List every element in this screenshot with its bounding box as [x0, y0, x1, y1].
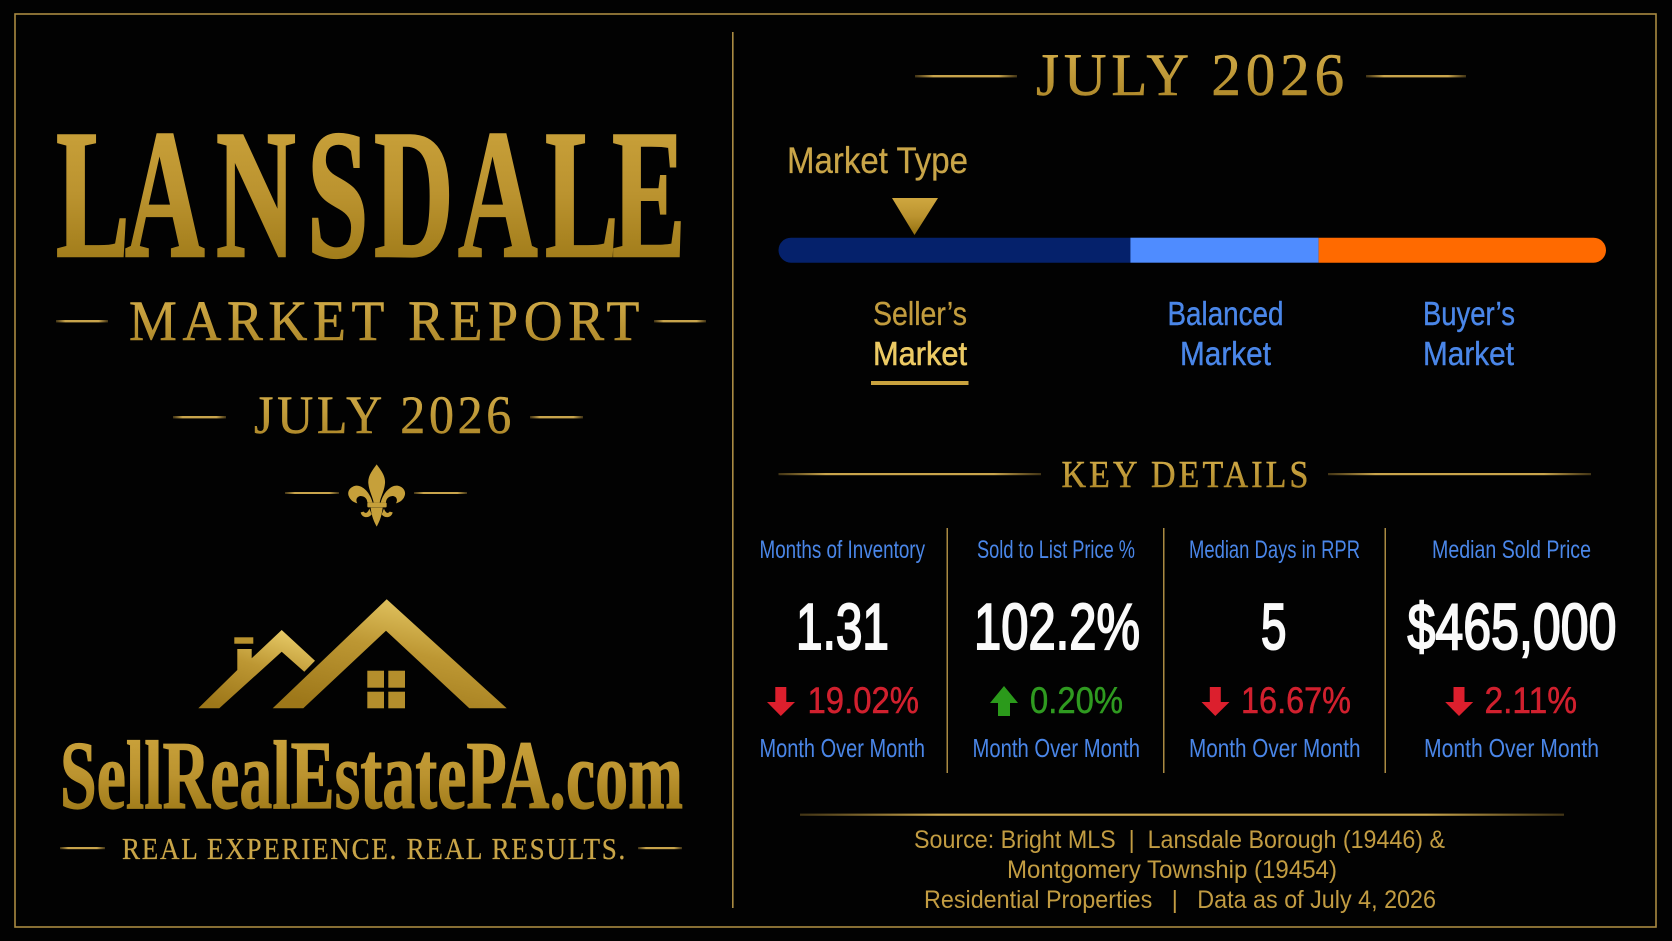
icon: down arrow	[1445, 687, 1473, 716]
metric: Months of Inventory: 19.02%	[808, 680, 919, 721]
icon: market pointer triangle	[892, 198, 938, 235]
icon: down arrow	[767, 687, 795, 716]
metric: Sold to List Price	[972, 536, 1140, 763]
icon: house roof logo	[198, 599, 507, 708]
column dividers	[946, 528, 1386, 773]
title: Lansdale: LANSDALE	[56, 92, 686, 296]
metric: Median Sold Price	[1408, 536, 1616, 763]
metric: Median Sold Price: Median Sold Price	[1432, 536, 1591, 564]
metric: Median Sold Price: $465,000	[1408, 590, 1616, 663]
label: Buyer's Market: Buyer’s	[1423, 295, 1515, 332]
center divider	[732, 32, 734, 908]
tagline: REAL EXPERIENCE. REAL RESULTS.	[122, 831, 627, 866]
metric: Sold to List Price: Month Over Month	[972, 733, 1140, 763]
metric: Median Days in RPR	[1189, 536, 1360, 763]
label: Seller's Market: Market	[873, 335, 967, 372]
heading: July 2026: JULY 2026	[1036, 42, 1349, 108]
source note	[914, 826, 1445, 914]
metric: Months of Inventory	[760, 536, 925, 763]
subtitle: Market Report: MARKET REPORT	[129, 290, 645, 353]
label: Balanced Market: Balanced	[1168, 295, 1284, 332]
metric: Median Sold Price: Month Over Month	[1424, 733, 1599, 763]
metric: Months of Inventory: 1.31	[796, 590, 889, 663]
label: Buyer's Market	[1423, 295, 1515, 372]
panel: right market data	[760, 42, 1616, 914]
heading: Key Details: KEY DETAILS	[1062, 454, 1312, 496]
icon: fleur-de-lis ornament	[285, 464, 467, 527]
metric: Median Days in RPR: Median Days in RPR	[1189, 536, 1360, 564]
metric: Median Sold Price: 2.11%	[1484, 680, 1577, 721]
market type scale bar	[779, 238, 1606, 263]
date: July 2026: JULY 2026	[254, 385, 515, 445]
label: Buyer's Market: Market	[1423, 335, 1514, 372]
icon: up arrow	[990, 686, 1018, 716]
metric: Median Days in RPR: 5	[1261, 590, 1286, 663]
source note: Residential Properties | Data as of July 4, 2026	[924, 886, 1436, 914]
metric: Median Days in RPR: Month Over Month	[1189, 733, 1360, 763]
metric: Sold to List Price: 102.2%	[974, 590, 1140, 663]
metric: Sold to List Price: Sold to List Price %	[977, 536, 1135, 564]
icon: down arrow	[1202, 687, 1230, 716]
source note: Montgomery Township (19454)	[1007, 856, 1337, 884]
label: Seller's Market: Seller’s	[873, 295, 967, 332]
label: Seller's Market	[871, 295, 968, 385]
brand website name: SellRealEstatePA.com	[60, 722, 683, 829]
metric: Months of Inventory: Month Over Month	[760, 733, 925, 763]
source note: Source: Bright MLS | Lansdale Borough (19446) &	[914, 826, 1445, 854]
metric: Sold to List Price: 0.20%	[1030, 680, 1123, 721]
source rule	[800, 814, 1564, 816]
metric: Months of Inventory: Months of Inventory	[760, 536, 925, 564]
panel: left branding	[56, 92, 706, 866]
label: Market Type: Market Type	[787, 140, 968, 181]
label: Balanced Market: Market	[1180, 335, 1271, 372]
label: Balanced Market	[1168, 295, 1284, 372]
metric: Median Days in RPR: 16.67%	[1241, 680, 1351, 721]
